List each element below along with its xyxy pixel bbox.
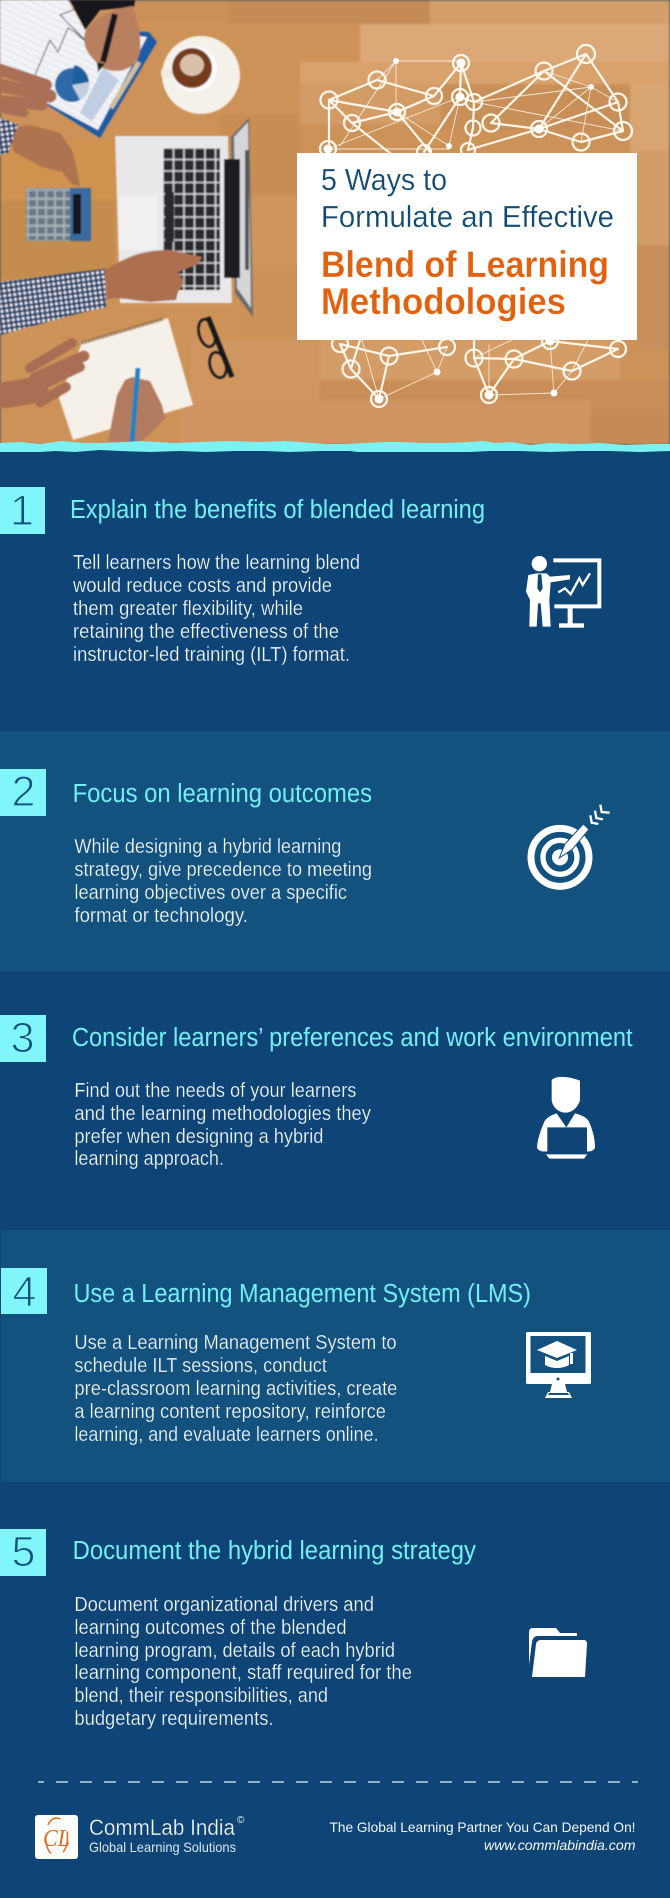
number badge 1: [0, 487, 45, 535]
body text 5: budgetary requirements.: [74, 1708, 274, 1730]
number badge 4: 4: [12, 1268, 36, 1316]
hand on calculator: [8, 125, 80, 187]
body text 5: [74, 1594, 412, 1730]
calculator: [26, 188, 91, 241]
body text 3: Find out the needs of your learners: [74, 1080, 356, 1102]
body text 4: Use a Learning Management System to: [74, 1332, 397, 1354]
number badge 1: 1: [10, 487, 34, 535]
heading 4: Use a Learning Management System (LMS): [74, 1280, 531, 1308]
number badge 2: [0, 768, 46, 816]
icon: folder: [529, 1628, 587, 1677]
body text 4: a learning content repository, reinforce: [74, 1401, 386, 1423]
number badge 2: 2: [12, 768, 35, 816]
number badge 5: [0, 1528, 46, 1576]
body text 4: pre-classroom learning activities, create: [74, 1378, 397, 1400]
torn cyan edge: [0, 441, 670, 460]
number badge 3: 3: [11, 1014, 35, 1062]
body text 5: Document organizational drivers and: [74, 1594, 374, 1616]
network graphic upper: [320, 45, 632, 165]
logo registered mark: ©: [237, 1815, 245, 1826]
number badge 5: 5: [12, 1528, 35, 1576]
body text 5: blend, their responsibilities, and: [74, 1685, 328, 1707]
heading 3: Consider learners’ preferences and work environment: [72, 1024, 632, 1052]
body text 2: strategy, give precedence to meeting: [74, 859, 372, 881]
hand on notebook: [5, 343, 84, 402]
title card: [297, 153, 637, 340]
panel: step 2: [0, 731, 670, 971]
network graphic lower: [332, 333, 626, 407]
hand with pencil: [108, 377, 165, 442]
left hand on paper: [0, 68, 50, 113]
footer tagline: The Global Learning Partner You Can Depend On!: [330, 1819, 636, 1835]
body text 1: retaining the effectiveness of the: [73, 621, 339, 643]
notebook: [59, 318, 193, 440]
body text 1: instructor-led training (ILT) format.: [73, 644, 350, 666]
body text 3: and the learning methodologies they: [74, 1103, 371, 1125]
panel: step 5: [0, 1528, 587, 1730]
footer tagline: [330, 1819, 636, 1853]
website: www.commlabindia.com: [484, 1837, 636, 1853]
heading 5: Document the hybrid learning strategy: [73, 1537, 476, 1565]
logo mark: CL: [43, 1826, 70, 1852]
body text 1: Tell learners how the learning blend: [73, 552, 360, 574]
body text 3: learning approach.: [74, 1148, 224, 1170]
heading 2: Focus on learning outcomes: [73, 780, 372, 808]
hand on laptop: [105, 250, 202, 302]
footer logo: CommLab India: [35, 1815, 245, 1859]
title highlight line 2: Methodologies: [321, 281, 566, 322]
objects: [0, 0, 253, 443]
writing hand: [84, 6, 140, 71]
body text 5: learning program, details of each hybrid: [74, 1640, 395, 1662]
logo name: CommLab India: [89, 1815, 236, 1840]
title line 1: 5 Ways to: [321, 162, 447, 197]
icon: monitor with graduation cap: [526, 1332, 591, 1398]
body text 1: them greater flexibility, while: [73, 598, 303, 620]
body text 3: prefer when designing a hybrid: [74, 1126, 323, 1148]
body text 4: learning, and evaluate learners online.: [74, 1424, 379, 1446]
panel: step 3: [0, 971, 670, 1230]
body text 5: learning component, staff required for the: [74, 1662, 412, 1684]
icon: learner at laptop: [537, 1077, 595, 1159]
number badge 4: [1, 1268, 47, 1316]
hero photo: desk from above: [0, 0, 670, 445]
glasses: [196, 317, 232, 380]
body text 4: [74, 1332, 397, 1446]
body text 2: format or technology.: [74, 905, 248, 927]
sleeve: [0, 269, 106, 335]
body text 5: learning outcomes of the blended: [74, 1617, 347, 1639]
icon: target with arrow: [531, 805, 610, 886]
clipboard and chart paper: [0, 0, 157, 138]
panel: step 4: [1, 1230, 670, 1482]
heading 1: Explain the benefits of blended learning: [70, 496, 485, 524]
dark sleeve: [70, 0, 135, 30]
body text 4: schedule ILT sessions, conduct: [74, 1355, 327, 1377]
body text 1: [72, 552, 360, 666]
icon: presenter with chart: [526, 556, 601, 628]
number badge 3: [0, 1014, 46, 1062]
laptop: [115, 136, 232, 303]
logo tagline: Global Learning Solutions: [89, 1839, 236, 1855]
body text 3: [74, 1080, 371, 1170]
body text 2: [74, 836, 372, 927]
logo mark: [35, 1815, 78, 1859]
title highlight line 1: Blend of Learning: [321, 244, 609, 285]
body text 2: learning objectives over a specific: [74, 882, 347, 904]
panel: step 1: [0, 452, 670, 731]
coffee saucer: [162, 36, 240, 114]
wood planks: [0, 0, 670, 445]
title line 2: Formulate an Effective: [321, 199, 614, 234]
body text 1: would reduce costs and provide: [72, 575, 332, 597]
body text 2: While designing a hybrid learning: [74, 836, 341, 858]
